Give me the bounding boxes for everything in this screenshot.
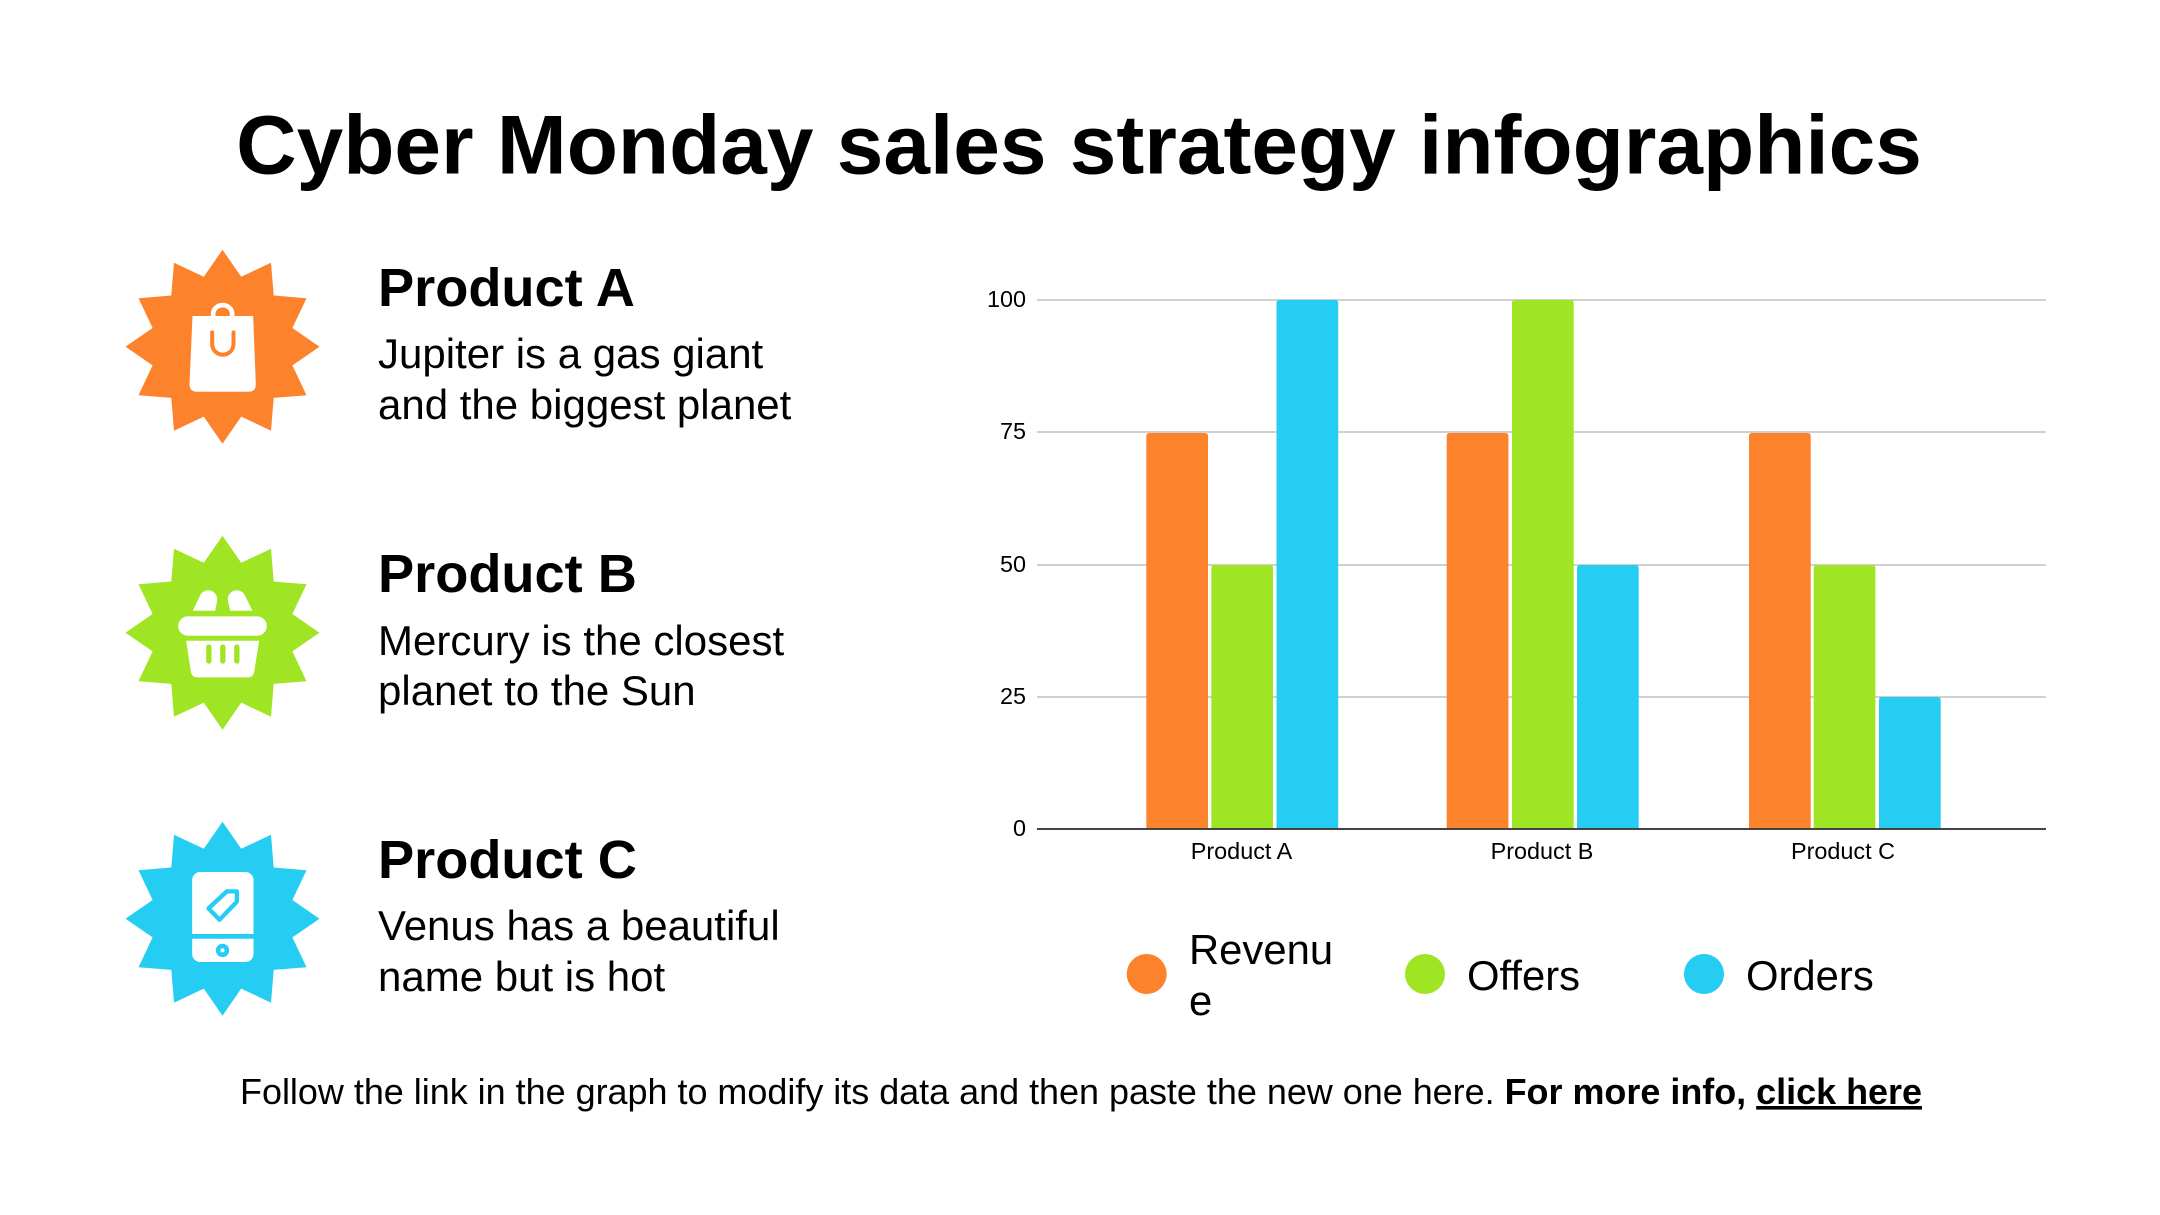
text: Product A description: and the biggest planet: [378, 381, 792, 428]
legend item: Revenue: Revenu: [1189, 926, 1333, 973]
x axis labels: Product A: [1191, 838, 1293, 864]
legend item: Orders: Orders: [1746, 952, 1874, 999]
title: Cyber Monday sales strategy infographics: [236, 98, 1922, 192]
icon: blue starburst with phone and tag: [126, 822, 320, 1016]
y axis labels: 25: [1000, 683, 1026, 709]
legend item: Offers: Offers: [1467, 952, 1580, 999]
bars: Product C: [1749, 433, 1941, 829]
y axis labels: [987, 286, 1026, 841]
text: Product B description: planet to the Sun: [378, 667, 696, 714]
footer note: Follow the link in the graph to modify its data and then paste the new one here. For more info, click here: [240, 1071, 1922, 1112]
text: Product B description: Mercury is the closest: [378, 617, 784, 664]
bars: Product B: [1447, 300, 1639, 829]
legend item: Revenue: e: [1189, 977, 1212, 1024]
y axis labels: 0: [1013, 815, 1026, 841]
x axis labels: [1191, 838, 1895, 864]
text: Product C description: Venus has a beautiful: [378, 902, 780, 949]
y axis labels: 100: [987, 286, 1026, 312]
heading: Product A: Product A: [378, 258, 635, 318]
bar chart: [987, 286, 2046, 864]
x axis labels: Product C: [1791, 838, 1895, 864]
icon: green starburst with basket: [126, 536, 320, 730]
panel: product C: [126, 822, 780, 1016]
heading: Product C: Product C: [378, 830, 637, 890]
panel: product A: [126, 250, 792, 444]
text: Product C description: name but is hot: [378, 953, 666, 1000]
legend item: Offers: [1405, 952, 1580, 999]
text: Product A description: Jupiter is a gas giant: [378, 330, 764, 377]
heading: Product B: Product B: [378, 544, 637, 604]
legend item: Orders: [1684, 952, 1874, 999]
icon: orange starburst with shopping bag: [126, 250, 320, 444]
panel: product B: [126, 536, 784, 730]
y axis labels: 75: [1000, 418, 1026, 444]
y axis labels: 50: [1000, 551, 1026, 577]
x axis labels: Product B: [1491, 838, 1593, 864]
bars: Product A: [1146, 300, 1338, 829]
legend item: Revenue: [1127, 926, 1333, 1024]
legend: [1127, 926, 1874, 1024]
